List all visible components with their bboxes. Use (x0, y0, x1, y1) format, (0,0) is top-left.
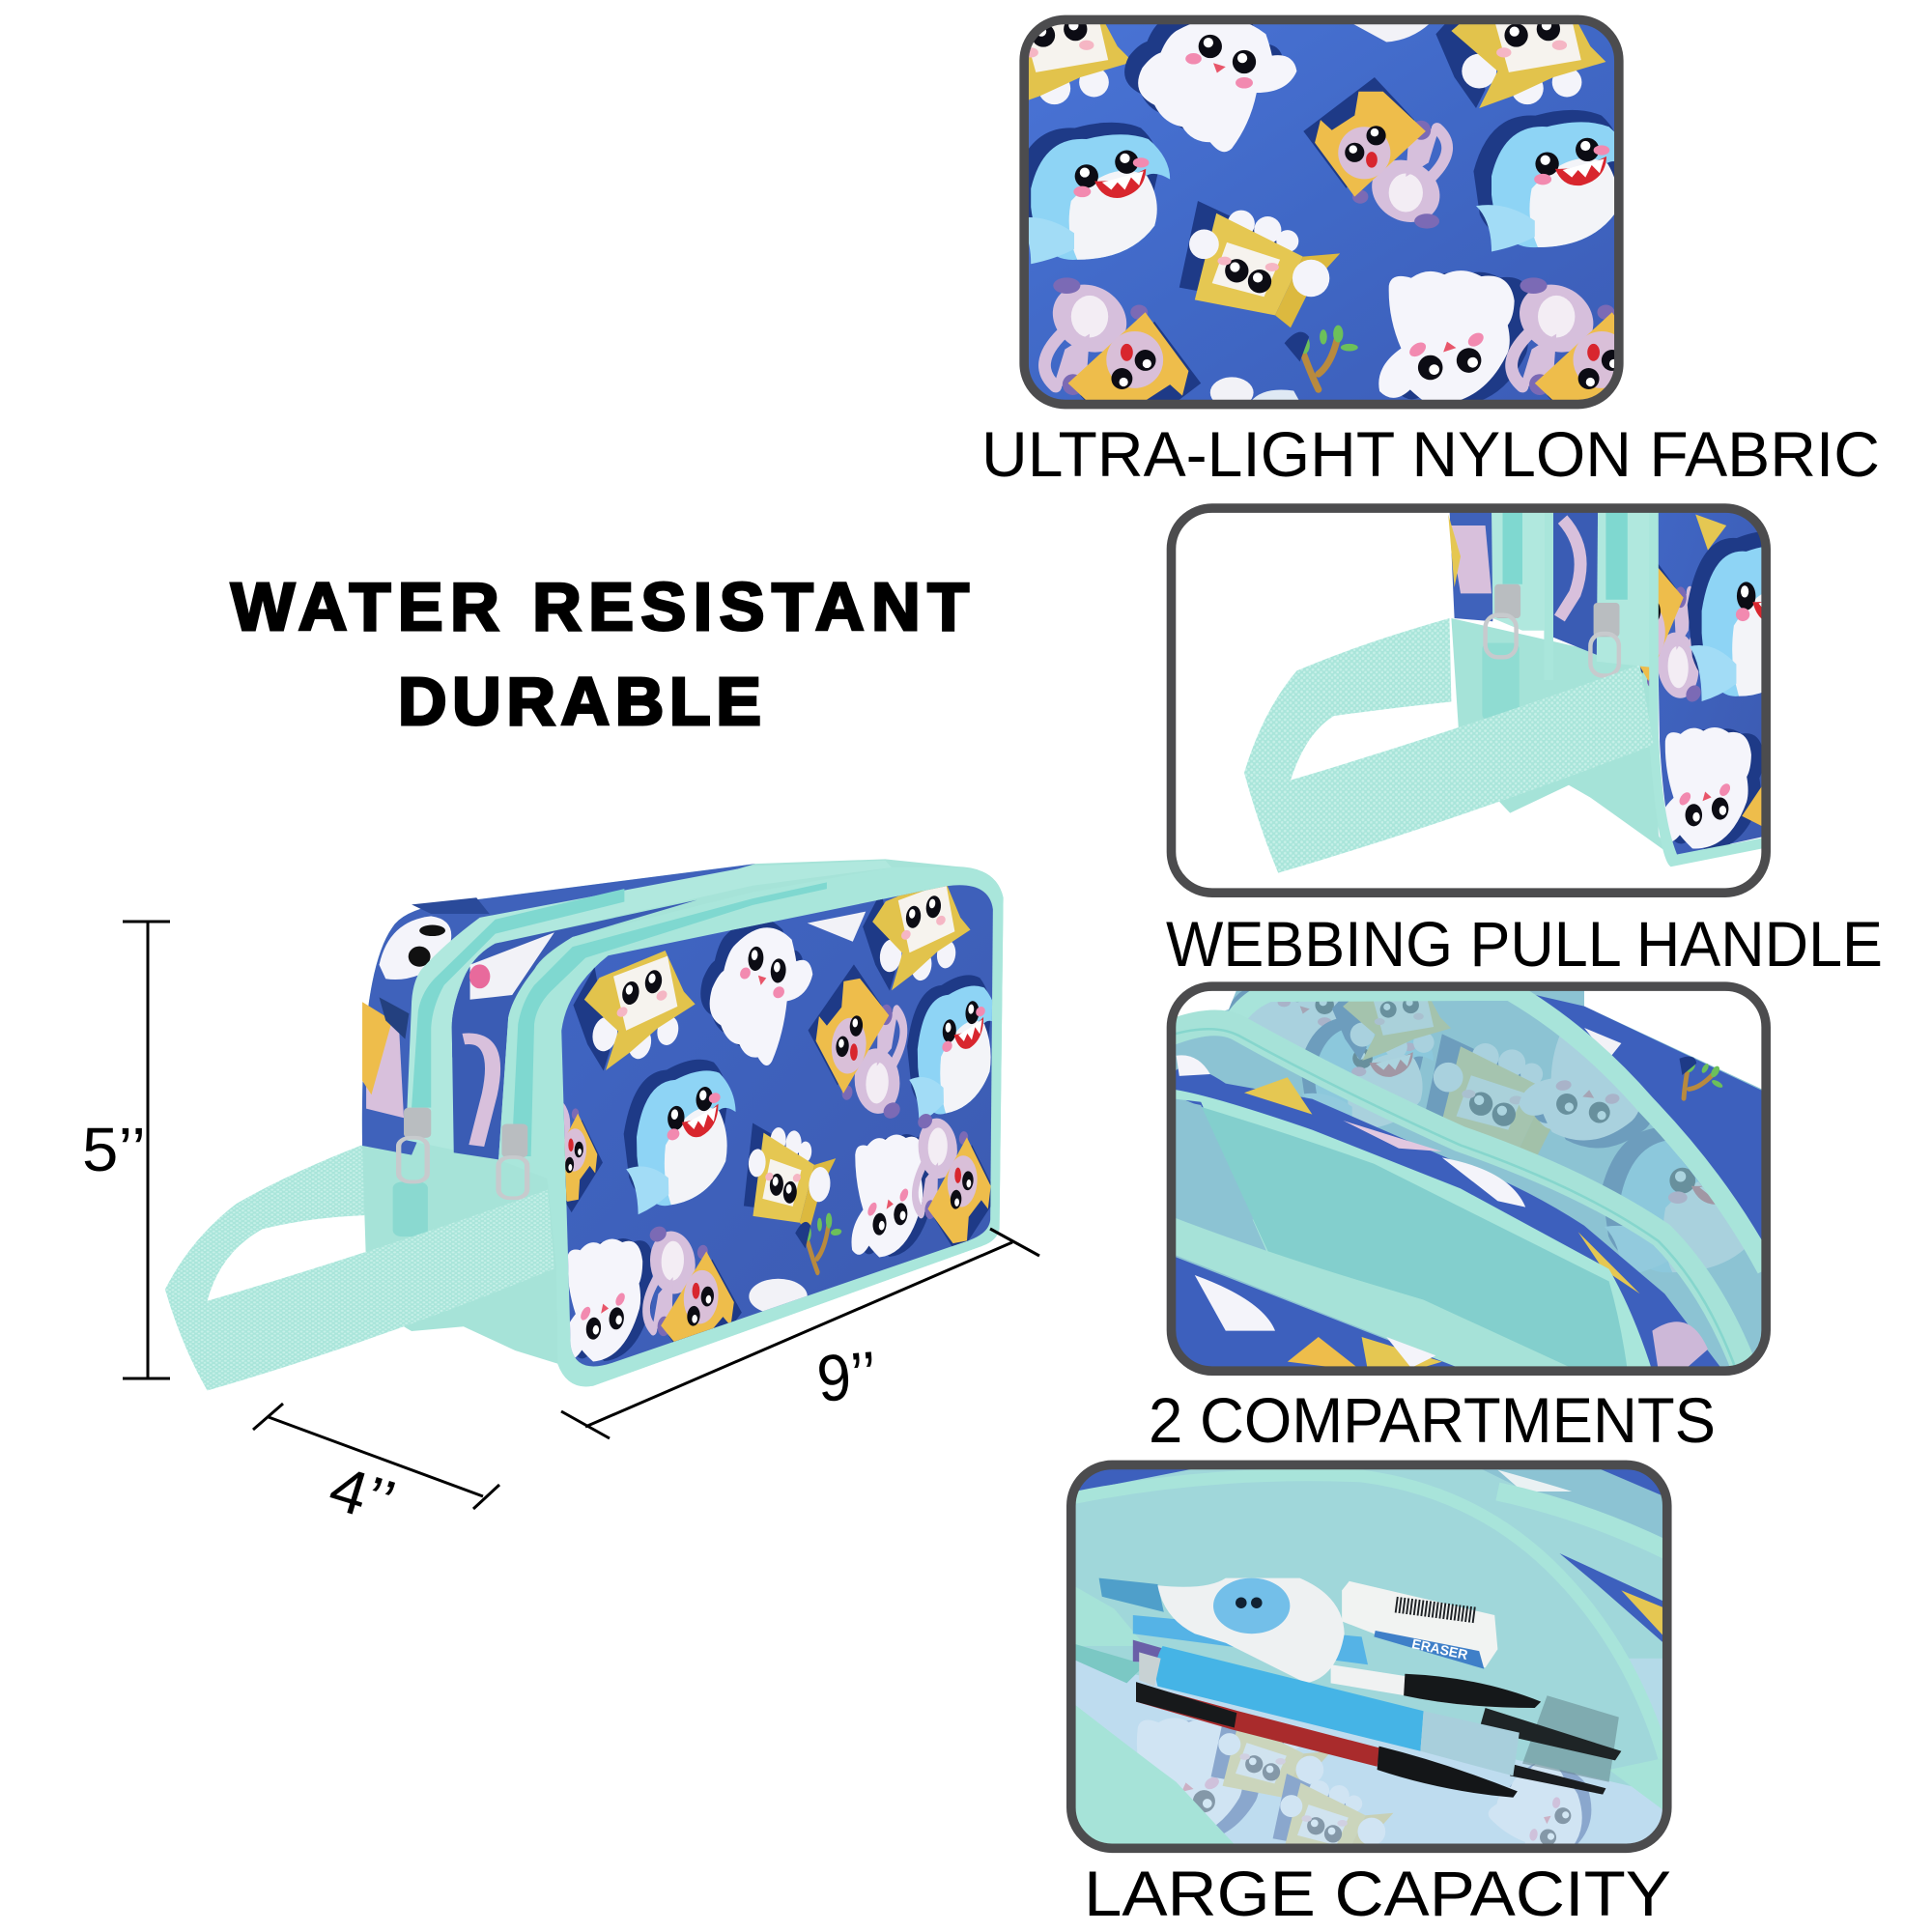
label: large capacity: LARGE CAPACITY (1084, 1858, 1671, 1929)
label: webbing pull handle: WEBBING PULL HANDLE (1166, 908, 1883, 980)
label: ultra-light nylon fabric: ULTRA-LIGHT NYLON FABRIC (981, 418, 1880, 490)
eraser (1342, 1581, 1497, 1669)
heading: water resistant durable: WATER RESISTANT (231, 569, 969, 644)
dimension: length 9 inches (561, 1229, 1039, 1438)
panel: webbing pull handle close-up (1171, 508, 1813, 893)
dimension: height 5 inches: 5’’ (82, 1115, 146, 1184)
panel: two compartments close-up (1167, 961, 1775, 1386)
dimension: width 4 inches: 4’’ (322, 1453, 403, 1538)
dimension: height 5 inches (82, 922, 170, 1378)
correction fluid bottle (1157, 1578, 1345, 1683)
eraser: ERASER (1410, 1635, 1469, 1662)
main product photo: pencil pouch (165, 859, 1004, 1400)
heading: water resistant durable: DURABLE (398, 664, 761, 739)
dimension: width 4 inches (253, 1404, 499, 1538)
panel: large capacity close-up (1071, 1464, 1667, 1880)
dimension: length 9 inches: 9’’ (814, 1338, 880, 1416)
red pencil (1136, 1682, 1518, 1798)
blue marker (1139, 1646, 1520, 1776)
label: 2 compartments: 2 COMPARTMENTS (1149, 1384, 1716, 1456)
heading: water resistant durable (231, 569, 969, 739)
panel: nylon fabric close-up (1019, 15, 1624, 410)
